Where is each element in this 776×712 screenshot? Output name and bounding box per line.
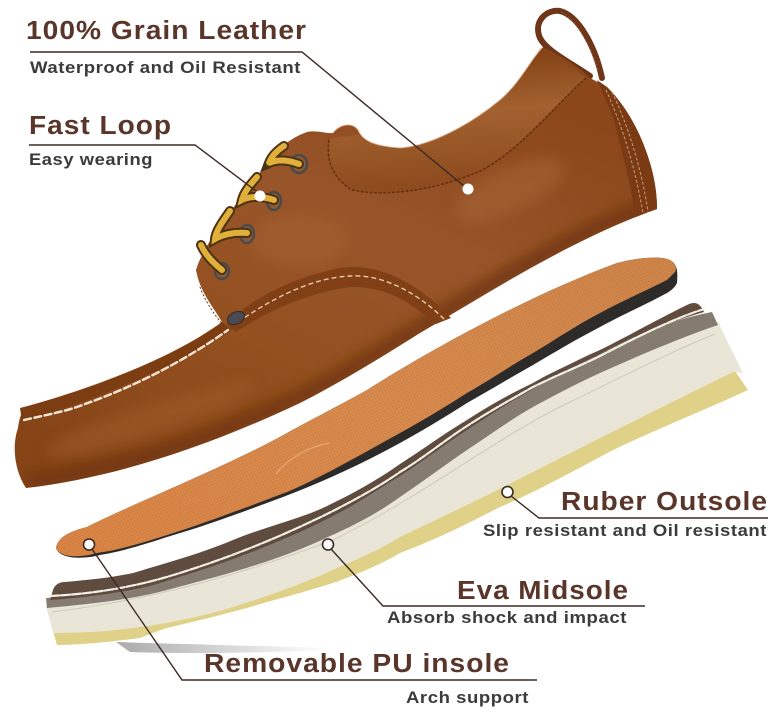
heel counter: [597, 80, 657, 217]
collar panel: [328, 48, 586, 192]
welt stitching: [50, 309, 704, 596]
collar lining edge: [333, 48, 541, 148]
insole texture: [56, 258, 676, 556]
insole top: [56, 258, 676, 556]
callout: Fast Loop: [29, 112, 266, 202]
midsole cream: [46, 322, 743, 633]
collar seam: [328, 78, 586, 193]
subheading: Waterproof and Oil Resistant: [30, 59, 301, 77]
eyestay stitches: [238, 276, 445, 322]
arch mark: [276, 443, 330, 474]
callout: Removable PU insole: [84, 539, 537, 707]
leader line: [92, 549, 537, 680]
pull loop: [538, 11, 602, 78]
subheading: Slip resistant and Oil resistant: [483, 522, 767, 540]
marker: [462, 184, 474, 194]
eyestay front seam: [200, 287, 226, 328]
subheading: Absorb shock and impact: [387, 609, 627, 627]
subheading: Arch support: [406, 689, 529, 707]
heading: Eva Midsole: [457, 577, 629, 605]
marker: [84, 539, 94, 550]
leader line: [30, 52, 464, 186]
eyelets: [215, 155, 307, 279]
callout: 100% Grain Leather: [26, 17, 474, 194]
heel stitches: [606, 90, 648, 214]
midsole crease: [52, 334, 715, 612]
midsole and outsole: [46, 303, 748, 645]
welt brown: [50, 303, 704, 600]
outsole yellow: [53, 368, 748, 645]
leader line: [331, 549, 645, 606]
ground shadow: [116, 642, 328, 653]
laces: [201, 146, 299, 270]
marker: [254, 190, 266, 202]
marker: [322, 539, 334, 550]
eyestay seam band: [226, 267, 451, 332]
leather body: [15, 47, 657, 488]
leather shading: [26, 145, 657, 482]
insole: [56, 258, 677, 558]
apron stitch band: [20, 322, 232, 422]
toe stitches: [24, 330, 228, 420]
heading: Removable PU insole: [204, 650, 510, 678]
heading: Fast Loop: [29, 112, 172, 140]
welt gray: [46, 312, 718, 608]
subheading: Easy wearing: [29, 151, 153, 169]
leader line: [29, 145, 256, 191]
heading: Ruber Outsole: [561, 488, 768, 516]
callout: Eva Midsole: [322, 539, 645, 627]
leader line: [511, 496, 768, 518]
marker: [502, 486, 513, 498]
callout: Ruber Outsole: [483, 486, 768, 540]
shoe upper: [15, 11, 657, 488]
insole black edge: [56, 258, 677, 558]
heading: 100% Grain Leather: [26, 17, 307, 45]
rivet: [225, 309, 247, 327]
